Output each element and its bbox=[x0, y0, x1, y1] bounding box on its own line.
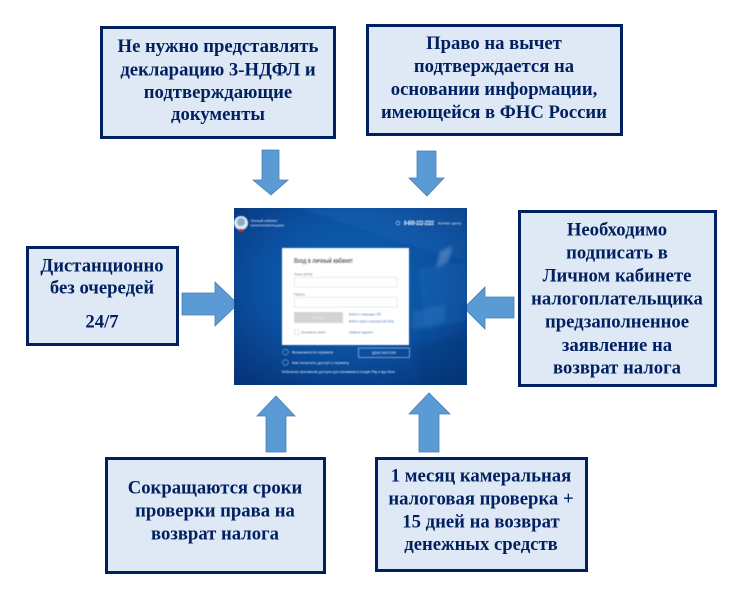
panel: shorter review period: Сокращаются сроки bbox=[128, 478, 302, 498]
arrow: left from right panel bbox=[464, 287, 514, 329]
panel: no declaration needed: Не нужно представлять bbox=[118, 36, 319, 57]
panel: right confirmed by FNS data bbox=[368, 26, 622, 134]
panel: remote without queues bbox=[28, 248, 178, 344]
panel: sign the application: налогоплательщика bbox=[531, 288, 704, 310]
panel: sign the application: возврат налога bbox=[553, 358, 682, 378]
arrow: right from left panel bbox=[182, 282, 238, 326]
portal name: Личный кабинет bbox=[250, 219, 278, 223]
panel: sign the application: Необходимо bbox=[567, 220, 667, 240]
demo button: ДЕМО-ВЕРСИЯ bbox=[372, 351, 397, 355]
arrow: up from bottom right panel bbox=[409, 393, 450, 452]
login form: Запомнить меня bbox=[301, 330, 326, 334]
service links: Как получить доступ к сервису bbox=[292, 360, 349, 365]
login screenshot bbox=[234, 208, 467, 385]
login form bbox=[282, 248, 409, 345]
arrow: down from top left panel bbox=[253, 150, 288, 195]
login form: Войти с помощью ЭП bbox=[349, 312, 382, 316]
login form: Вход в личный кабинет bbox=[294, 257, 353, 265]
logo emblem bbox=[234, 216, 248, 232]
panel: sign the application: подписать в bbox=[566, 242, 668, 264]
panel: sign the application: Личном кабинете bbox=[543, 266, 691, 286]
login form: Логин (ИНН) bbox=[294, 272, 312, 276]
portal name bbox=[250, 219, 284, 228]
panel: right confirmed by FNS data: имеющейся в ФНС России bbox=[381, 102, 607, 123]
phone header bbox=[396, 221, 461, 227]
panel: right confirmed by FNS data: основании информации, bbox=[391, 79, 597, 100]
panel: remote without queues: без очередей bbox=[50, 278, 154, 298]
panel: sign the application bbox=[520, 212, 716, 386]
panel: sign the application: заявление на bbox=[562, 335, 673, 356]
panel: one month review plus 15 days: 1 месяц камеральная bbox=[391, 466, 571, 486]
panel: remote without queues: 24/7 bbox=[85, 312, 119, 332]
panel: no declaration needed: декларацию 3-НДФЛ и bbox=[120, 60, 316, 80]
phone header: 8-800-222-2222 bbox=[404, 221, 434, 227]
panel: no declaration needed: подтверждающие bbox=[144, 82, 292, 103]
panel: no declaration needed: документы bbox=[171, 104, 265, 125]
login form: Войти через госуслуги (ЕСИА) bbox=[349, 320, 394, 324]
panel: shorter review period: проверки права на bbox=[135, 500, 296, 522]
login form: Пароль bbox=[294, 292, 305, 296]
login form: Забыли пароль? bbox=[349, 330, 374, 334]
panel: shorter review period bbox=[106, 458, 324, 572]
service links: Возможности сервиса bbox=[292, 350, 334, 354]
panel: no declaration needed bbox=[102, 28, 334, 138]
login form: ВОЙТИ bbox=[313, 316, 325, 320]
panel: one month review plus 15 days: налоговая проверка + bbox=[388, 488, 574, 510]
panel: shorter review period: возврат налога bbox=[151, 524, 280, 544]
panel: remote without queues: Дистанционно bbox=[40, 256, 164, 276]
panel: right confirmed by FNS data: подтверждается на bbox=[414, 56, 575, 77]
portal name: налогоплательщика bbox=[250, 224, 284, 228]
arrow: down from top right panel bbox=[409, 151, 444, 196]
service links: Мобильное приложение доступно для скачивания в Google Play и App Store bbox=[282, 370, 395, 374]
panel: sign the application: предзаполненное bbox=[545, 312, 689, 332]
panel: one month review plus 15 days: 15 дней на возврат bbox=[402, 512, 560, 532]
demo button bbox=[358, 348, 410, 358]
panel: one month review plus 15 days bbox=[376, 458, 586, 570]
service links bbox=[282, 349, 395, 374]
phone header: Контакт-центр bbox=[438, 222, 461, 226]
panel: one month review plus 15 days: денежных средств bbox=[404, 534, 558, 555]
arrow: up from bottom left panel bbox=[257, 396, 295, 452]
panel: right confirmed by FNS data: Право на вычет bbox=[426, 33, 562, 54]
